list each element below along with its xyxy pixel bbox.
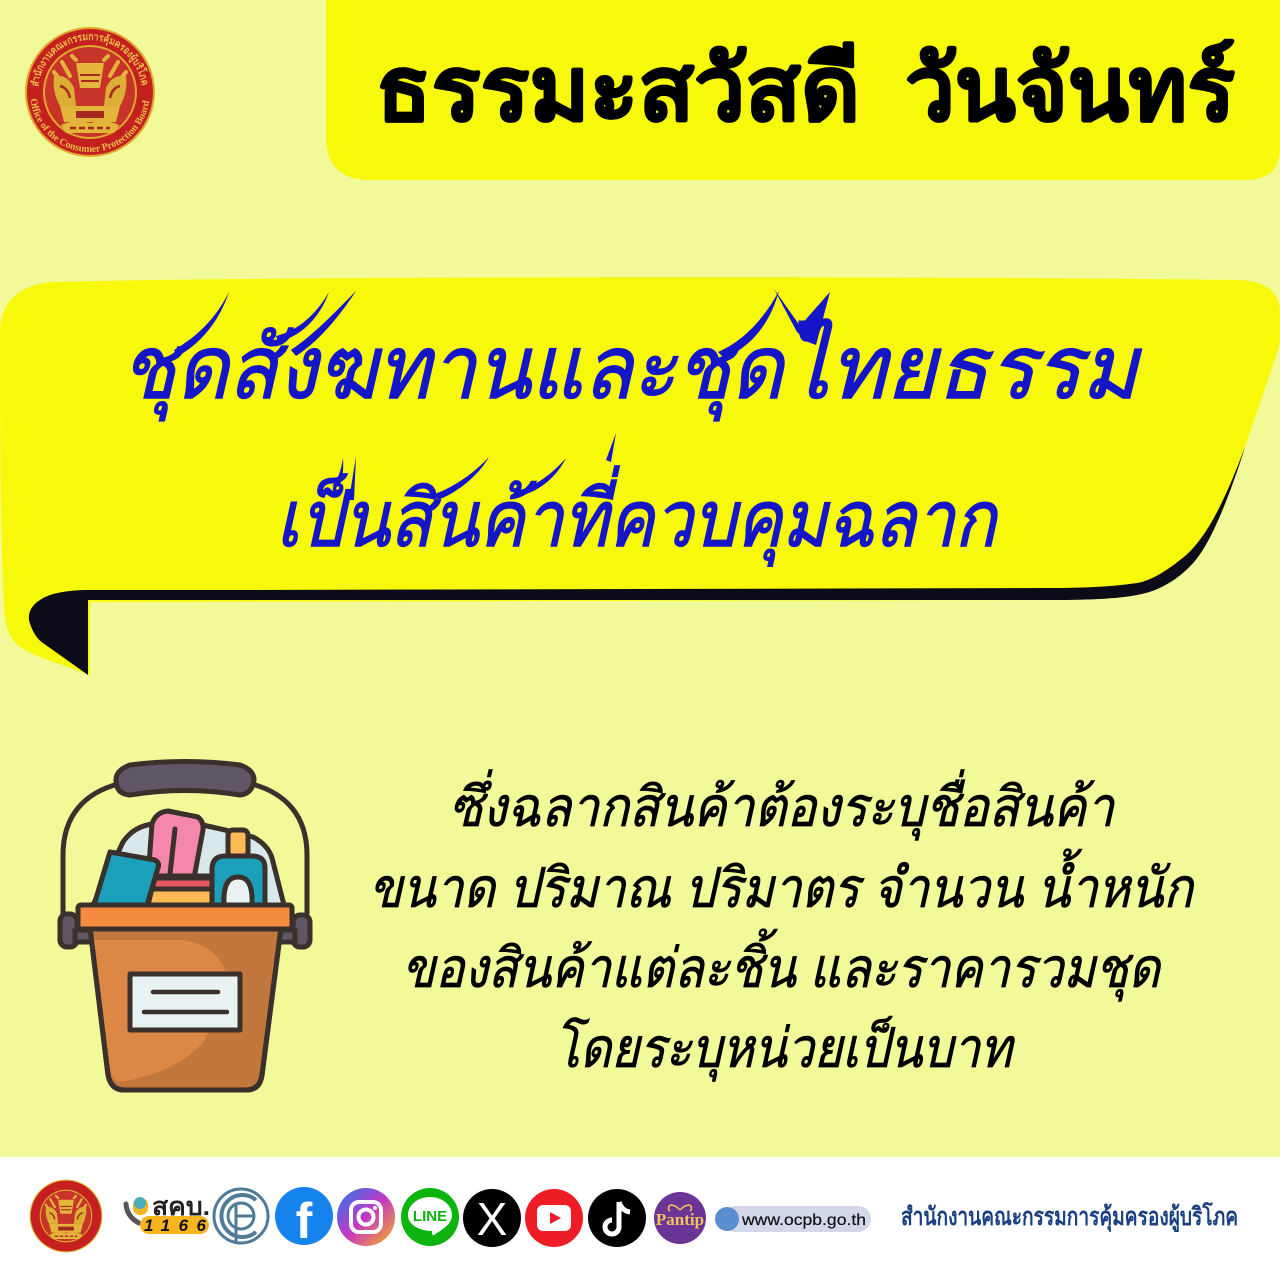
footer logo <box>30 1180 102 1252</box>
icon: instagram <box>337 1188 395 1246</box>
body text <box>369 769 1195 1082</box>
icon: TikTok <box>588 1189 646 1247</box>
logo: consumer protection board seal <box>25 27 155 157</box>
heading line one: first part: ชุดสังฆทานและชุด <box>121 318 787 421</box>
body line 4: โดยระบุหน่วยเป็นบาท <box>554 1016 1015 1082</box>
icon: bucket of offerings <box>60 762 310 1090</box>
title: greeting text: วันจันทร์ <box>905 39 1235 140</box>
icon: YouTube <box>525 1189 583 1247</box>
body line 2: ขนาด ปริมาณ ปริมาตร จำนวน น้ำหนัก <box>369 848 1195 919</box>
icon: facebook: f <box>296 1193 313 1249</box>
icon: OCPB <box>214 1189 268 1243</box>
footer band <box>0 1157 1280 1280</box>
heading line two: เป็นสินค้าที่ควบคุมฉลาก <box>276 465 999 567</box>
hotline 1166: 1166 <box>144 1216 207 1235</box>
icon: LINE <box>401 1188 459 1246</box>
decorative flourishes on heading letters <box>174 289 830 500</box>
website pill: www.ocpb.go.th <box>741 1212 866 1229</box>
body line 1: ซึ่งฉลากสินค้าต้องระบุชื่อสินค้า <box>449 769 1116 841</box>
icon: Pantip <box>654 1192 706 1244</box>
hotline 1166: สคบ. <box>152 1193 210 1221</box>
banner: greeting <box>326 0 1280 180</box>
icon: LINE: LINE <box>413 1208 447 1225</box>
icon: X: X <box>477 1193 507 1245</box>
icon: facebook <box>275 1187 333 1249</box>
panel: headline ribbon <box>0 277 1280 675</box>
website pill <box>715 1206 871 1232</box>
logo: consumer protection board seal: Office of the Consumer Protection Board <box>30 98 150 152</box>
body line 3: ของสินค้าแต่ละชิ้น และราคารวมชุด <box>402 928 1163 1002</box>
title: greeting text: ธรรมะสวัสดี <box>376 40 860 140</box>
heading line one: second part: ไทยธรรม <box>786 318 1142 417</box>
hotline 1166 <box>126 1193 210 1235</box>
icon: X <box>463 1189 521 1247</box>
logo: consumer protection board seal: สำนักงานคณะกรรมการคุ้มครองผู้บริโภค <box>30 34 148 86</box>
icon: Pantip: Pantip <box>656 1210 704 1229</box>
title: greeting text <box>376 39 1235 140</box>
